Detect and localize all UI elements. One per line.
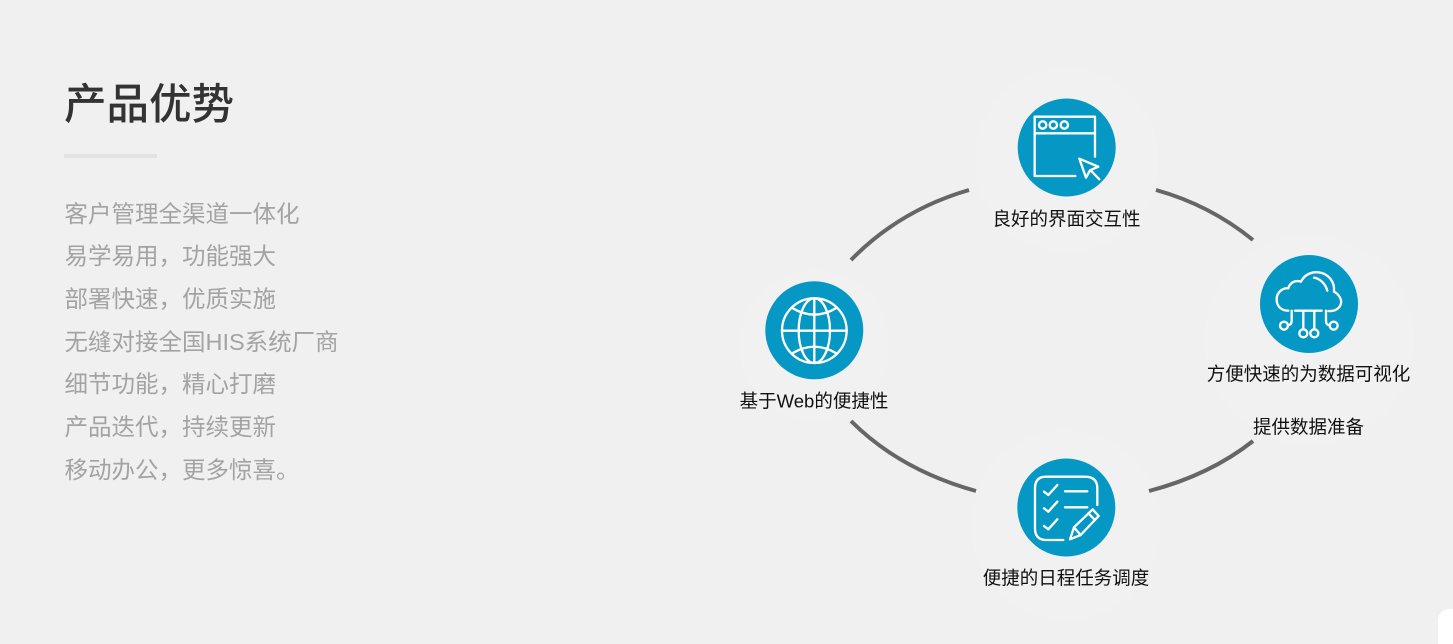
text block: advantages list: 部署快速，优质实施 <box>64 286 276 312</box>
icon: checklist with pencil <box>1017 458 1115 556</box>
arrow: top-right arc <box>1156 190 1253 240</box>
text block: advantages list <box>64 201 339 483</box>
text block: advantages list: 客户管理全渠道一体化 <box>64 201 300 227</box>
node: cloud data visualization <box>1207 255 1410 438</box>
icon: browser window with cursor <box>1018 98 1116 196</box>
label: 基于Web的便捷性 <box>740 390 888 412</box>
text block: advantages list: 细节功能，精心打磨 <box>64 371 276 397</box>
label: 提供数据准备 <box>1253 416 1364 438</box>
arrow: bottom-left arc <box>851 421 976 491</box>
text block: advantages list: 无缝对接全国HIS系统厂商 <box>64 329 339 355</box>
arrow: bottom-right arc <box>1149 441 1253 491</box>
node: interface interaction <box>992 98 1141 230</box>
title underline <box>64 154 157 158</box>
label: 方便快速的为数据可视化 <box>1207 364 1410 384</box>
node: schedule management <box>983 458 1149 588</box>
text block: advantages list: 产品迭代，持续更新 <box>64 414 276 440</box>
node: web convenience <box>740 281 888 412</box>
icon: globe <box>765 281 863 379</box>
text block: advantages list: 移动办公，更多惊喜。 <box>64 457 300 483</box>
text block: advantages list: 易学易用，功能强大 <box>64 243 276 269</box>
label: 良好的界面交互性 <box>992 208 1141 230</box>
white corner tab <box>1438 609 1453 644</box>
arrow: top-left arc <box>851 190 969 260</box>
icon: cloud with circuit <box>1260 255 1358 353</box>
title: 产品优势 <box>64 82 234 128</box>
label: 便捷的日程任务调度 <box>983 568 1149 588</box>
